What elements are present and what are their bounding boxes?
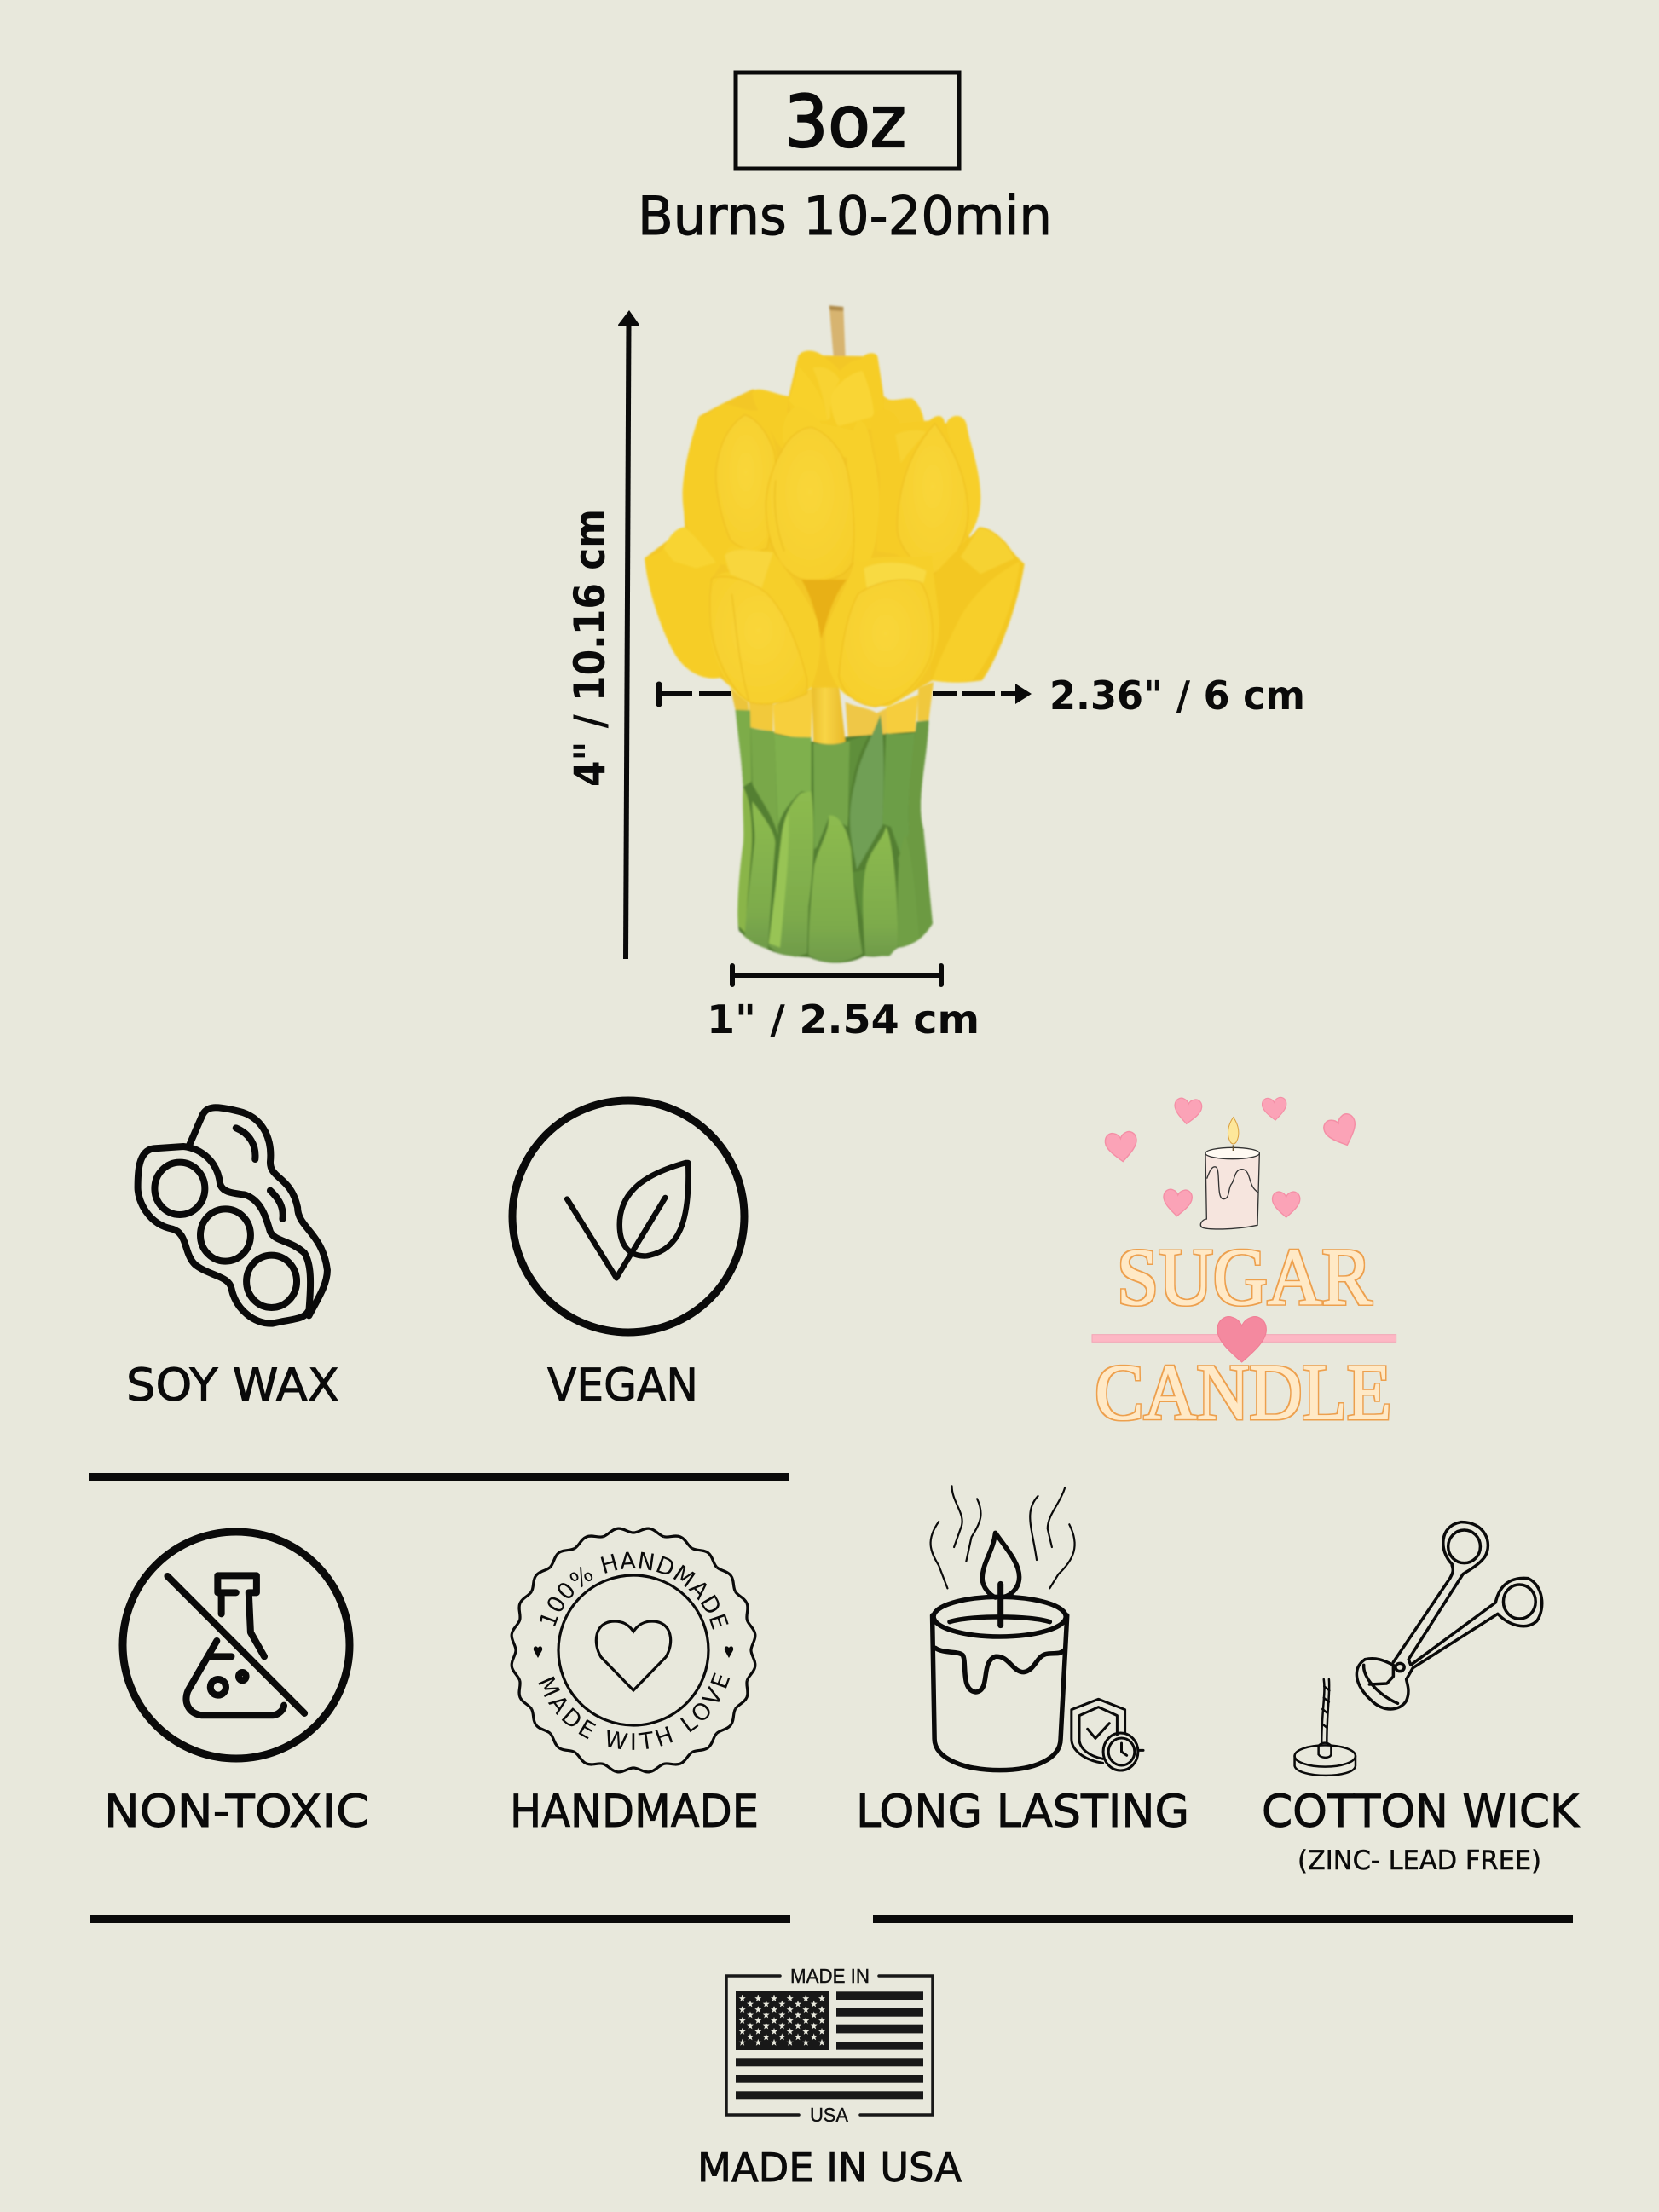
- divider: [90, 1915, 790, 1923]
- icon: non-toxic: [123, 1532, 350, 1759]
- divider with heart: [1092, 1317, 1396, 1362]
- stamp text: 100% HANDMADE: [540, 1551, 729, 1630]
- brand text: CANDLE: [1095, 1349, 1391, 1437]
- icon: wick trimmer and cotton wick: [1295, 1522, 1542, 1776]
- label: zinc lead free: (ZINC- LEAD FREE): [1298, 1845, 1541, 1876]
- hearts: [1104, 1097, 1362, 1217]
- stems and leaves: [731, 679, 934, 962]
- trimmer: [1356, 1522, 1542, 1709]
- label: width: 2.36" / 6 cm: [1049, 673, 1305, 719]
- scalloped edge: [495, 1512, 772, 1788]
- label: non-toxic: NON-TOXIC: [104, 1786, 369, 1838]
- badge: made in USA flag: USA: [810, 2104, 849, 2126]
- icon: soy wax: [138, 1107, 327, 1324]
- divider: [873, 1915, 1573, 1923]
- label: cotton wick: COTTON WICK: [1262, 1786, 1580, 1838]
- label: long lasting: LONG LASTING: [856, 1786, 1189, 1838]
- divider: [89, 1473, 789, 1481]
- small candle: [1200, 1118, 1259, 1229]
- stamp hearts: [534, 1646, 733, 1658]
- badge: made in USA flag: MADE IN: [790, 1965, 870, 1987]
- icon: long lasting candle: [931, 1486, 1143, 1770]
- arrow: width dashed dimension: [659, 684, 1032, 704]
- label: height: 4" / 10.16 cm: [565, 509, 615, 787]
- label: soy wax: SOY WAX: [126, 1360, 339, 1412]
- brand text: SUGAR: [1117, 1232, 1373, 1322]
- icon: vegan: [512, 1100, 744, 1332]
- label: base: 1" / 2.54 cm: [707, 996, 980, 1042]
- badge: made in USA flag: [726, 1965, 933, 2126]
- candle body: [933, 1533, 1067, 1770]
- stamp text: MADE WITH LOVE: [539, 1672, 730, 1750]
- shield and clock: [1072, 1699, 1143, 1770]
- text: burn time: Burns 10-20min: [638, 185, 1052, 247]
- logo: sugar candle: [1092, 1097, 1396, 1437]
- tulip heads: [645, 305, 1025, 707]
- heading: 3oz size box: 3oz: [784, 80, 906, 164]
- icon: handmade stamp: [510, 1528, 757, 1773]
- smoke: [931, 1486, 1075, 1588]
- label: made in usa: MADE IN USA: [697, 2145, 962, 2191]
- heading: 3oz size box: [736, 72, 959, 169]
- label: handmade: HANDMADE: [510, 1786, 759, 1838]
- arrow: height dimension: [618, 310, 639, 959]
- photo: tulip bouquet candle: [645, 305, 1025, 962]
- wick: [1295, 1679, 1356, 1776]
- label: vegan: VEGAN: [547, 1360, 698, 1412]
- arrow: base dimension: [732, 966, 941, 985]
